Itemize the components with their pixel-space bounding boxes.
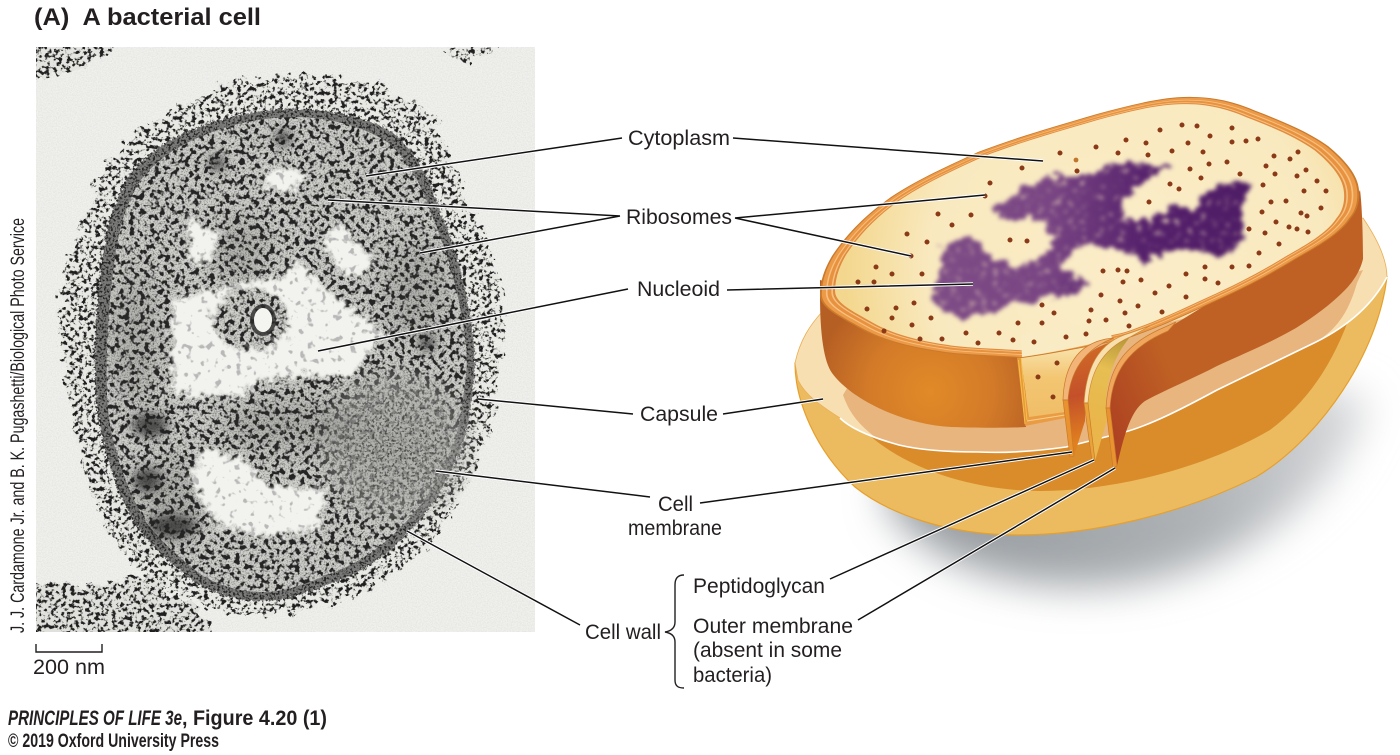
flap: cell membrane <box>1063 338 1114 457</box>
nucleoid <box>931 161 1252 318</box>
brace <box>665 575 684 688</box>
figure caption <box>8 707 327 752</box>
label: capsule: Capsule <box>640 403 718 426</box>
capsule lower dome <box>795 277 1387 535</box>
top surface rim layers <box>820 97 1359 358</box>
capsule inner dark band <box>868 300 1352 491</box>
cell body left wall <box>820 280 1026 428</box>
label: ribosomes: Ribosomes <box>626 206 732 229</box>
label: cell membrane: membrane <box>628 517 722 540</box>
capsule translucent disc <box>795 218 1387 452</box>
vacuole <box>252 306 274 334</box>
photo credit: J. J. Cardamone Jr. and B. K. Pugashetti/Biological Photo Service <box>8 218 29 633</box>
scale label: 200 nm <box>33 656 105 679</box>
label: cell membrane <box>628 493 722 540</box>
label: peptidoglycan: Peptidoglycan <box>693 575 825 598</box>
label: cytoplasm: Cytoplasm <box>628 127 730 150</box>
top surface cytoplasm <box>835 104 1344 351</box>
capsule peach band <box>843 270 1363 452</box>
leader line: peptidoglycan <box>830 460 1094 579</box>
label: cell wall: Cell wall <box>585 621 661 644</box>
capsule white edge line <box>840 277 1387 452</box>
label: nucleoid: Nucleoid <box>637 278 720 301</box>
title: (A) A bacterial cell <box>34 4 261 31</box>
label: outer membrane: Outer membrane <box>693 615 853 638</box>
caption: book title: PRINCIPLES OF LIFE 3e <box>8 707 182 730</box>
micrograph background <box>36 47 535 632</box>
leader lines: cell membrane <box>436 452 1072 503</box>
leader line: cell wall <box>407 531 580 625</box>
lower right dense cytoplasm <box>310 360 480 530</box>
dark ribosome patches <box>132 130 435 537</box>
label: outer membrane: bacteria) <box>693 664 772 687</box>
label: outer membrane: (absent in some <box>693 639 842 662</box>
caption: figure number: , Figure 4.20 (1) <box>182 707 327 730</box>
darker ribosome bands <box>113 218 445 545</box>
cut cytoplasm face <box>1020 340 1090 418</box>
panel: bacterial cell illustration <box>795 97 1387 587</box>
cell body right wall <box>1107 190 1363 468</box>
label: outer membrane <box>693 615 853 687</box>
leader line: outer membrane <box>858 468 1115 620</box>
ribosome pale <box>1074 158 1078 162</box>
leader lines: capsule <box>478 399 823 414</box>
flap: outer membrane <box>1106 322 1176 468</box>
label: cell membrane: Cell <box>658 493 693 516</box>
leader lines: ribosomes <box>328 195 985 256</box>
cell wall ring <box>95 109 475 601</box>
scale bar <box>36 644 102 652</box>
nucleoid pale regions <box>172 168 382 536</box>
cut edge of cytoplasm <box>1021 320 1112 357</box>
cytoplasm with ribosomes <box>107 117 467 592</box>
capsule mesh and fragments <box>20 30 501 650</box>
cast shadow <box>885 380 1370 587</box>
caption: copyright: © 2019 Oxford University Press <box>8 731 219 752</box>
leader lines: cytoplasm <box>366 138 1043 176</box>
cut wall end stripes <box>1017 356 1065 426</box>
panel: electron micrograph <box>20 30 535 650</box>
flap: peptidoglycan <box>1084 326 1150 461</box>
ribosomes <box>858 125 1326 397</box>
leader lines: nucleoid <box>318 284 973 351</box>
